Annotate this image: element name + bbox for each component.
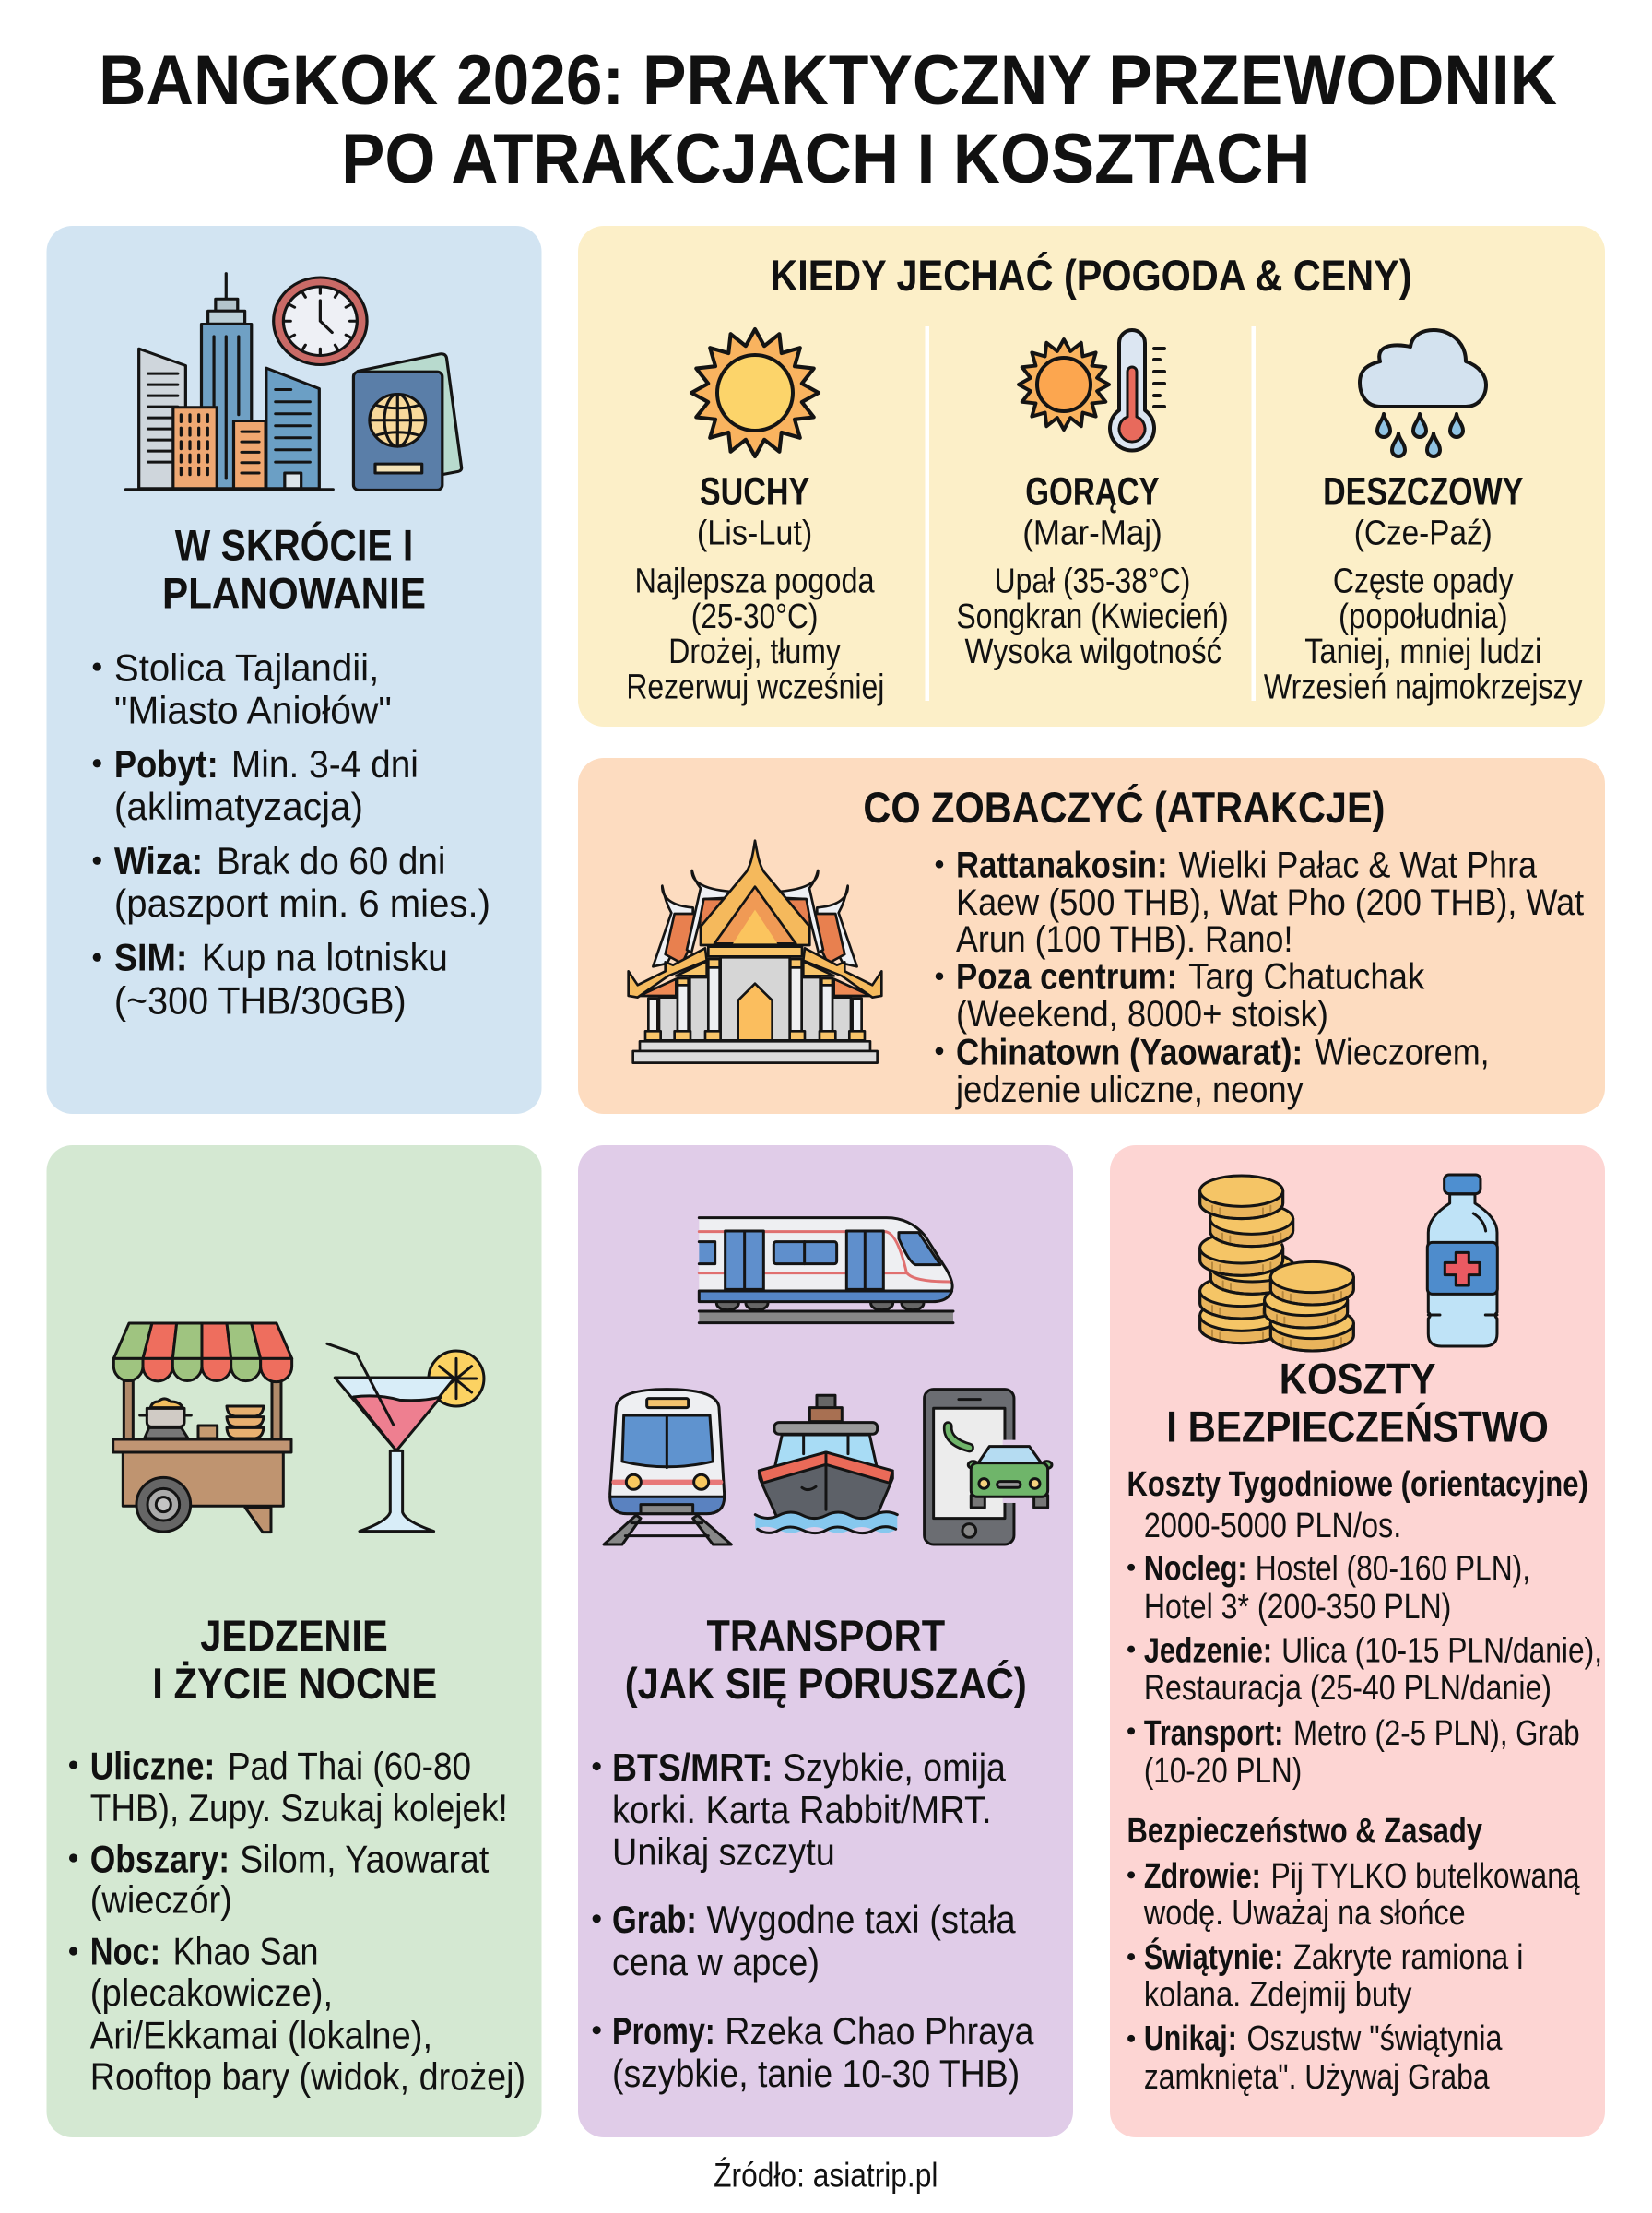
text block: deszczowy: Wrzesień najmokrzejszy	[1264, 667, 1583, 706]
text block: koszty tygodniowe: (10-20 PLN)	[1144, 1751, 1302, 1791]
icon: side view train	[699, 1218, 953, 1323]
text block: jedzenie bullets: Pad Thai (60-80	[228, 1744, 471, 1787]
heading: kiedy jechać: KIEDY JECHAĆ (POGODA & CENY)	[770, 250, 1412, 301]
text block: jedzenie bullets: Khao San	[173, 1930, 318, 1973]
text block: bezpieczeństwo i zasady: Zakryte ramiona i	[1293, 1937, 1523, 1977]
icon: city, clock and passport	[125, 274, 462, 490]
text block: jedzenie bullets: (wieczór)	[90, 1878, 232, 1922]
text block: transport bullets: (szybkie, tanie 10-30 THB)	[612, 2052, 1020, 2095]
text block: planowanie bullets: Brak do 60 dni	[217, 839, 445, 882]
title: PO ATRAKCJACH I KOSZTACH	[341, 120, 1310, 198]
text block: suchy: (Lis-Lut)	[697, 514, 812, 553]
text block: atrakcje bullets: Wieczorem,	[1315, 1032, 1490, 1072]
icon: sun	[691, 329, 819, 456]
icon: street food cart	[113, 1323, 292, 1533]
text block: koszty tygodniowe: Hotel 3* (200-350 PLN)	[1144, 1587, 1451, 1627]
text block: koszty tygodniowe: Restauracja (25-40 PLN/danie)	[1144, 1668, 1552, 1708]
heading: jedzenie i życie nocne: I ŻYCIE NOCNE	[152, 1660, 437, 1709]
text block: atrakcje bullets: Wielki Pałac & Wat Phra	[1178, 846, 1538, 886]
panel: transport	[578, 1145, 1073, 2137]
text block: deszczowy	[1264, 470, 1583, 706]
text block: atrakcje bullets: Targ Chatuchak	[1188, 957, 1424, 998]
text block: koszty tygodniowe: 2000-5000 PLN/os.	[1144, 1506, 1401, 1545]
text block: suchy	[626, 470, 884, 706]
text block: transport bullets: cena w apce)	[612, 1940, 820, 1983]
icon: sun and thermometer	[1019, 330, 1164, 450]
text block: atrakcje bullets: Poza centrum:	[956, 957, 1177, 998]
text block: planowanie bullets: Wiza:	[114, 839, 203, 882]
icon: water bottle	[1427, 1175, 1497, 1346]
text block: bezpieczeństwo i zasady: kolana. Zdejmij buty	[1144, 1975, 1412, 2015]
text block: atrakcje bullets: jedzenie uliczne, neony	[955, 1070, 1304, 1110]
text block: bezpieczeństwo i zasady: Pij TYLKO butelkowaną	[1271, 1856, 1580, 1896]
text block: suchy: (25-30°C)	[691, 597, 818, 636]
heading: w skrócie i planowanie	[162, 519, 426, 618]
text block: gorący: Upał (35-38°C)	[995, 562, 1190, 601]
text block: bezpieczeństwo i zasady: Świątynie:	[1144, 1936, 1283, 1977]
icon: thai temple	[629, 841, 881, 1063]
source line: Źródło: asiatrip.pl	[714, 2156, 938, 2194]
text block: atrakcje bullets: Chinatown (Yaowarat):	[956, 1032, 1303, 1072]
heading: co zobaczyć: CO ZOBACZYĆ (ATRAKCJE)	[863, 782, 1385, 833]
text block: jedzenie bullets: THB), Zupy. Szukaj kolejek!	[90, 1786, 508, 1829]
text block: transport bullets: BTS/MRT:	[612, 1746, 773, 1789]
text block: transport bullets: Wygodne taxi (stała	[707, 1898, 1016, 1941]
heading: jedzenie i życie nocne	[152, 1612, 437, 1709]
text block: planowanie bullets: Stolica Tajlandii,	[114, 645, 379, 689]
text block: bezpieczeństwo i zasady: Unikaj:	[1144, 2018, 1237, 2058]
text block: planowanie bullets: Min. 3-4 dni	[231, 742, 419, 786]
text block: suchy: Najlepsza pogoda	[634, 562, 875, 601]
heading: transport	[625, 1612, 1027, 1709]
text block: jedzenie bullets: Ari/Ekkamai (lokalne),	[90, 2014, 432, 2057]
text block: planowanie bullets: "Miasto Aniołów"	[114, 688, 392, 731]
text block: atrakcje bullets: Rattanakosin:	[956, 846, 1168, 886]
text block: transport bullets: korki. Karta Rabbit/MRT.	[612, 1788, 992, 1831]
text block: bezpieczeństwo i zasady: Bezpieczeństwo & Zasady	[1127, 1811, 1483, 1851]
text block: planowanie bullets	[93, 645, 490, 1022]
title	[99, 41, 1557, 198]
text block: koszty tygodniowe: Jedzenie:	[1144, 1630, 1272, 1670]
text block: bezpieczeństwo i zasady: Zdrowie:	[1144, 1856, 1261, 1896]
icon: cocktail	[327, 1343, 484, 1532]
text block: koszty tygodniowe: Nocleg:	[1144, 1549, 1247, 1589]
text block: bezpieczeństwo i zasady: zamknięta". Używaj Graba	[1144, 2057, 1490, 2097]
title: BANGKOK 2026: PRAKTYCZNY PRZEWODNIK	[99, 41, 1557, 120]
heading: transport: (JAK SIĘ PORUSZAĆ)	[625, 1658, 1027, 1709]
text block: transport bullets: Szybkie, omija	[783, 1746, 1006, 1789]
text block: planowanie bullets: Pobyt:	[114, 742, 218, 786]
text block: transport bullets	[593, 1746, 1034, 2095]
text block: jedzenie bullets: Rooftop bary (widok, drożej)	[90, 2055, 525, 2099]
text block: deszczowy: DESZCZOWY	[1323, 470, 1523, 515]
text block: bezpieczeństwo i zasady: wodę. Uważaj na słońce	[1143, 1893, 1466, 1933]
heading: koszty i bezpieczeństwo	[1166, 1355, 1549, 1452]
heading: koszty i bezpieczeństwo: KOSZTY	[1280, 1355, 1436, 1404]
text block: deszczowy: (Cze-Paź)	[1354, 514, 1493, 553]
text block: atrakcje bullets	[936, 846, 1584, 1110]
text block: planowanie bullets: (paszport min. 6 mies.)	[114, 882, 490, 925]
panel: kiedy jechać	[578, 226, 1605, 727]
text block: gorący: GORĄCY	[1025, 470, 1160, 515]
text block: planowanie bullets: Kup na lotnisku	[202, 936, 448, 979]
heading: w skrócie i planowanie: PLANOWANIE	[162, 569, 426, 618]
text block: atrakcje bullets: Arun (100 THB). Rano!	[956, 919, 1292, 960]
heading: transport: TRANSPORT	[707, 1612, 945, 1661]
heading: w skrócie i planowanie: W SKRÓCIE I	[175, 519, 413, 570]
text block: koszty tygodniowe	[1127, 1464, 1602, 1791]
text block: planowanie bullets: SIM:	[114, 936, 187, 979]
icon: rain cloud	[1360, 330, 1486, 456]
text block: jedzenie bullets: Noc:	[90, 1930, 160, 1973]
text block: atrakcje bullets: Kaew (500 THB), Wat Pho (200 THB), Wat	[956, 882, 1584, 923]
text block: deszczowy: Częste opady	[1333, 562, 1514, 601]
text block: suchy: Drożej, tłumy	[668, 632, 842, 671]
panel: co zobaczyć	[578, 758, 1605, 1114]
icon: ferry boat	[755, 1395, 897, 1533]
text block: jedzenie bullets	[69, 1744, 525, 2099]
text block: atrakcje bullets: (Weekend, 8000+ stoisk)	[956, 994, 1328, 1035]
text block: deszczowy: Taniej, mniej ludzi	[1304, 632, 1541, 671]
icon: front view metro	[604, 1390, 731, 1544]
panel: koszty i bezpieczeństwo	[1110, 1145, 1605, 2137]
text block: gorący	[956, 470, 1229, 671]
text block: deszczowy: (popołudnia)	[1339, 597, 1508, 636]
icon: phone with taxi	[925, 1390, 1052, 1544]
text block: gorący: (Mar-Maj)	[1022, 514, 1162, 553]
text block: koszty tygodniowe: Transport:	[1144, 1713, 1283, 1753]
text block: koszty tygodniowe: Hostel (80-160 PLN),	[1256, 1549, 1530, 1589]
icon: coin stacks	[1200, 1176, 1353, 1351]
text block: bezpieczeństwo i zasady: Oszustw "świątynia	[1247, 2018, 1503, 2058]
text block: bezpieczeństwo i zasady	[1127, 1811, 1580, 2097]
text block: jedzenie bullets: Uliczne:	[90, 1744, 215, 1787]
text block: koszty tygodniowe: Metro (2-5 PLN), Grab	[1293, 1713, 1580, 1753]
text block: transport bullets: Rzeka Chao Phraya	[725, 2009, 1034, 2053]
panel: w skrócie i planowanie	[46, 226, 542, 1114]
text block: jedzenie bullets: (plecakowicze),	[90, 1971, 333, 2015]
text block: planowanie bullets: (~300 THB/30GB)	[114, 978, 407, 1022]
text block: planowanie bullets: (aklimatyzacja)	[114, 785, 363, 828]
text block: gorący: Songkran (Kwiecień)	[956, 597, 1229, 636]
panel: jedzenie i życie nocne	[46, 1145, 542, 2137]
text block: transport bullets: Grab:	[612, 1898, 697, 1941]
heading: koszty i bezpieczeństwo: I BEZPIECZEŃSTWO	[1166, 1402, 1549, 1452]
text block: jedzenie bullets: Silom, Yaowarat	[240, 1837, 490, 1880]
text block: gorący: Wysoka wilgotność	[965, 632, 1221, 671]
text block: jedzenie bullets: Obszary:	[90, 1837, 230, 1880]
heading: jedzenie i życie nocne: JEDZENIE	[200, 1612, 388, 1661]
text block: suchy: Rezerwuj wcześniej	[626, 667, 884, 706]
text block: transport bullets: Promy:	[612, 2009, 715, 2053]
text block: transport bullets: Unikaj szczytu	[612, 1830, 835, 1874]
text block: suchy: SUCHY	[700, 470, 809, 515]
